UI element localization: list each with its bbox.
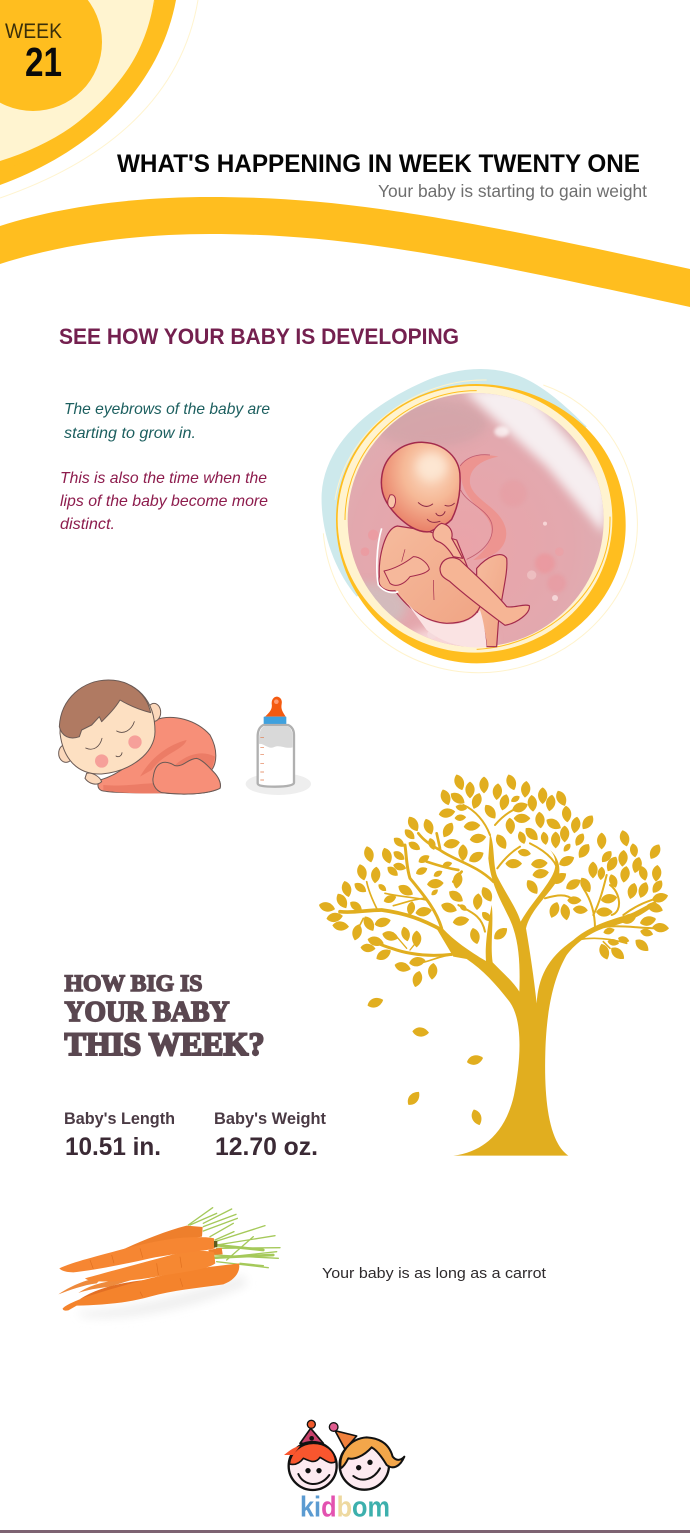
trunk [436, 833, 657, 1156]
stat: baby's weight: 12.70 oz. [215, 1133, 318, 1161]
tree [318, 773, 669, 1156]
baby body [98, 717, 220, 794]
stat: baby's length [64, 1109, 175, 1161]
sleeping baby [59, 680, 220, 794]
kidbom logo [284, 1420, 404, 1524]
falling leaves [366, 995, 484, 1127]
week label [5, 20, 62, 85]
baby bottle [246, 697, 311, 795]
baby face [60, 681, 155, 774]
shaded carrot [80, 1279, 173, 1299]
carrot tail [58, 1277, 137, 1294]
stat: baby's length: Baby's Length [64, 1109, 175, 1128]
thin outer rings [323, 385, 637, 673]
week label: 21 [25, 39, 62, 85]
leaves [318, 773, 669, 988]
heading: how big is your baby: HOW BIG IS [64, 971, 202, 996]
baby features [128, 735, 142, 749]
development note: lips [60, 470, 268, 533]
development note: lips: distinct. [60, 516, 115, 533]
back carrots [122, 1226, 203, 1250]
heading: how big is your baby [64, 971, 264, 1063]
week label: WEEK [5, 20, 62, 43]
baby hand and ears [85, 773, 102, 784]
far leg [477, 555, 507, 647]
middle carrot [85, 1251, 215, 1281]
header sun decoration [0, 0, 198, 198]
development note: eyebrows: The eyebrows of the baby are [64, 401, 270, 418]
fetus illustration in womb [322, 369, 637, 673]
face [418, 503, 454, 522]
logo wordmark: kidbom [300, 1492, 390, 1524]
umbilical cord [460, 455, 506, 560]
teal blob [322, 369, 587, 597]
subtitle: Your baby is starting to gain weight [378, 181, 647, 201]
boy face [284, 1420, 337, 1490]
wave band [0, 197, 690, 307]
stat: baby's length: 10.51 in. [65, 1133, 161, 1161]
stat: baby's weight [214, 1109, 326, 1161]
stat: baby's weight: Baby's Weight [214, 1109, 326, 1128]
title: WHAT'S HAPPENING IN WEEK TWENTY ONE [117, 150, 640, 178]
heading: how big is your baby: YOUR BABY [64, 997, 230, 1028]
carrot greens [188, 1208, 280, 1268]
baby hair [59, 680, 151, 738]
development note: lips: lips of the baby become more [60, 493, 268, 510]
branches [340, 805, 657, 963]
carrot comparison text: Your baby is as long as a carrot [322, 1265, 547, 1282]
hand at chin [433, 523, 463, 558]
arm [384, 557, 429, 585]
footer bar [0, 1530, 690, 1533]
yellow ring [336, 384, 626, 663]
womb interior [348, 393, 604, 647]
heading: how big is your baby: THIS WEEK? [64, 1027, 264, 1063]
near leg [440, 558, 529, 625]
development note: lips: This is also the time when the [60, 470, 267, 487]
top carrot [59, 1237, 215, 1272]
head [381, 442, 460, 532]
bottom carrot [63, 1263, 239, 1311]
cream ring [338, 386, 612, 653]
development note: eyebrows [64, 401, 270, 442]
development note: eyebrows: starting to grow in. [64, 425, 196, 442]
girl face [329, 1423, 404, 1490]
torso [379, 526, 480, 623]
carrots [58, 1208, 280, 1318]
ear [388, 495, 396, 508]
section heading: SEE HOW YOUR BABY IS DEVELOPING [59, 324, 459, 349]
